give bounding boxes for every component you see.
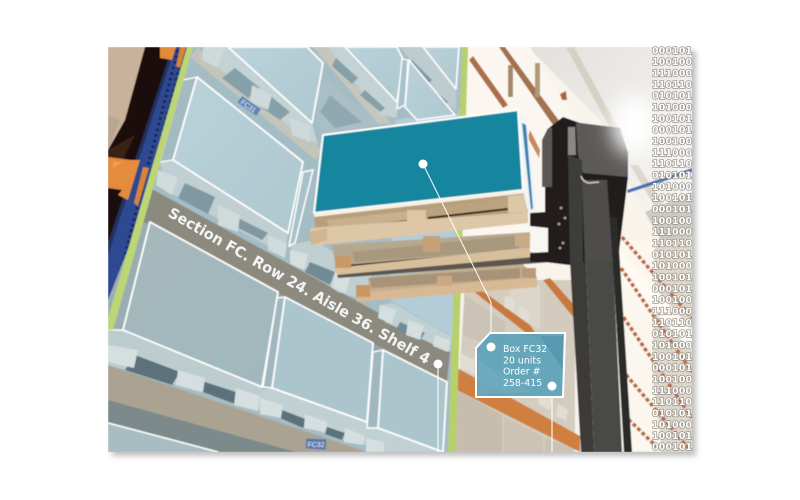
callout text: 20 units xyxy=(503,356,541,366)
load box highlighted in teal xyxy=(314,110,538,217)
binary data column: 110110 xyxy=(652,238,692,250)
blue upright post xyxy=(108,47,188,300)
binary data column: 010101 xyxy=(652,408,692,420)
box: large middle xyxy=(160,77,303,233)
warehouse infographic scene xyxy=(108,46,699,459)
binary data column: 000101 xyxy=(652,284,692,295)
forklift mast and carriage xyxy=(530,117,632,452)
section shelf beam xyxy=(138,188,450,382)
binary data column: 100100 xyxy=(652,136,692,148)
pallet under top box xyxy=(202,47,318,145)
binary data column: 111000 xyxy=(652,227,692,238)
box: behind load side xyxy=(289,170,313,246)
lower mast xyxy=(570,262,594,452)
callout text: Box FC32 xyxy=(503,344,547,355)
binary data column: 010101 xyxy=(652,250,692,261)
binary data column: 110110 xyxy=(652,318,692,329)
pallet behind load xyxy=(290,240,372,300)
light panel right of the mast xyxy=(618,240,692,452)
callout: box details xyxy=(476,333,565,397)
binary data column xyxy=(652,46,692,453)
binary data column: 101000 xyxy=(652,102,692,114)
upper orange brown rack beams xyxy=(469,47,567,158)
lower pallet xyxy=(356,262,537,302)
green line right xyxy=(448,47,468,452)
panel: rack left of the green line xyxy=(108,47,188,300)
binary data column: 000101 xyxy=(652,204,692,216)
box: bottom row xyxy=(108,423,218,452)
binary data column: 100101 xyxy=(652,193,692,204)
pallet under middle lower box xyxy=(260,388,367,445)
binary data column: 101000 xyxy=(652,261,692,272)
box: top row centre right xyxy=(345,47,403,102)
binary data column: 111000 xyxy=(652,386,692,397)
binary data column: 000101 xyxy=(652,442,692,453)
upper block xyxy=(576,123,628,177)
callout text: Order # xyxy=(503,366,541,378)
shelf tag upper: FC31 xyxy=(239,99,257,115)
lower orange shelf beams xyxy=(474,290,536,332)
box: top right corner xyxy=(423,47,459,89)
anchor dot in callout top xyxy=(486,342,496,352)
middle pallet xyxy=(332,232,534,275)
box: lower middle xyxy=(263,297,373,422)
binary data column: 100101 xyxy=(652,114,692,125)
green line left xyxy=(108,47,193,330)
binary data column: 101000 xyxy=(652,420,692,431)
box: lower right xyxy=(367,350,447,452)
mast centre panel xyxy=(582,180,613,265)
pallet under large middle box xyxy=(156,160,288,258)
pallet under right lower box xyxy=(366,428,443,452)
steel bar xyxy=(336,254,552,278)
binary data column: 010101 xyxy=(652,329,692,340)
leader line from load to callout xyxy=(423,164,491,347)
binary data column: 110110 xyxy=(652,80,692,91)
binary data column: 101000 xyxy=(652,340,692,352)
anchor dot in callout bottom xyxy=(548,382,556,390)
binary data column: 100100 xyxy=(652,216,692,227)
photo frame xyxy=(108,47,700,452)
thin upright xyxy=(610,217,632,452)
shelf tag upper xyxy=(237,96,261,117)
binary data column: 100100 xyxy=(652,295,692,306)
shelf tag FC32 xyxy=(306,438,326,450)
binary data column: 000101 xyxy=(652,363,692,374)
anchor dot on shelf label xyxy=(434,360,442,368)
panel: highlighted rack overlay xyxy=(108,47,468,452)
upper pallet xyxy=(310,193,528,246)
blue strap xyxy=(627,168,692,193)
pallet under left lower box xyxy=(108,330,262,411)
binary data column: 010101 xyxy=(652,170,692,182)
pallet beneath lifted load on rack xyxy=(378,303,452,352)
shaded background bays xyxy=(316,72,378,135)
binary data column: 100101 xyxy=(652,431,692,442)
lower shelf beam xyxy=(108,365,367,452)
shelf tag FC32: FC32 xyxy=(307,442,325,449)
speckled orange beams xyxy=(620,237,692,450)
binary data column: 100101 xyxy=(652,272,692,284)
panel: lifted pallets xyxy=(310,193,552,302)
anchor dot on load xyxy=(418,160,428,168)
callout text: 258-415 xyxy=(503,378,542,389)
white panel behind forks xyxy=(530,228,548,252)
ceiling xyxy=(530,47,692,126)
binary data column: 101000 xyxy=(652,182,692,193)
binary data column: 111000 xyxy=(652,306,692,318)
leader line from shelf label xyxy=(437,364,439,452)
pallet blocks on shelves xyxy=(460,295,568,421)
binary data column: 100101 xyxy=(652,352,692,363)
pallets under top right boxes xyxy=(328,47,456,118)
lower tan boxes xyxy=(455,280,575,452)
binary data column: 110110 xyxy=(652,397,692,408)
box: lower left xyxy=(108,222,278,387)
panel: warehouse racks and ceiling on the right xyxy=(454,47,700,452)
piston rod xyxy=(568,127,576,155)
upper wall xyxy=(528,47,532,51)
dark carriage xyxy=(530,117,628,265)
leader line below callout xyxy=(551,386,553,452)
orange brackets xyxy=(160,47,176,60)
binary data column: 110110 xyxy=(652,159,692,170)
binary data column: 111000 xyxy=(652,148,692,159)
binary data column: 100100 xyxy=(652,374,692,386)
picture drop shadow xyxy=(112,51,696,456)
upper shelf beam xyxy=(190,48,322,160)
box: rack row below top right xyxy=(397,59,455,120)
binary data column: 000101 xyxy=(652,125,692,136)
binary data column: 100100 xyxy=(652,57,692,68)
binary data column: 000101 xyxy=(652,46,692,57)
light glow xyxy=(612,95,656,155)
binary data column: 111000 xyxy=(652,68,692,80)
left plate xyxy=(542,128,552,187)
box: top row centre xyxy=(228,47,323,123)
shelf label text: Section FC. Row 24. Aisle 36. Shelf 4 xyxy=(165,204,433,368)
binary data column: 010101 xyxy=(652,91,692,102)
